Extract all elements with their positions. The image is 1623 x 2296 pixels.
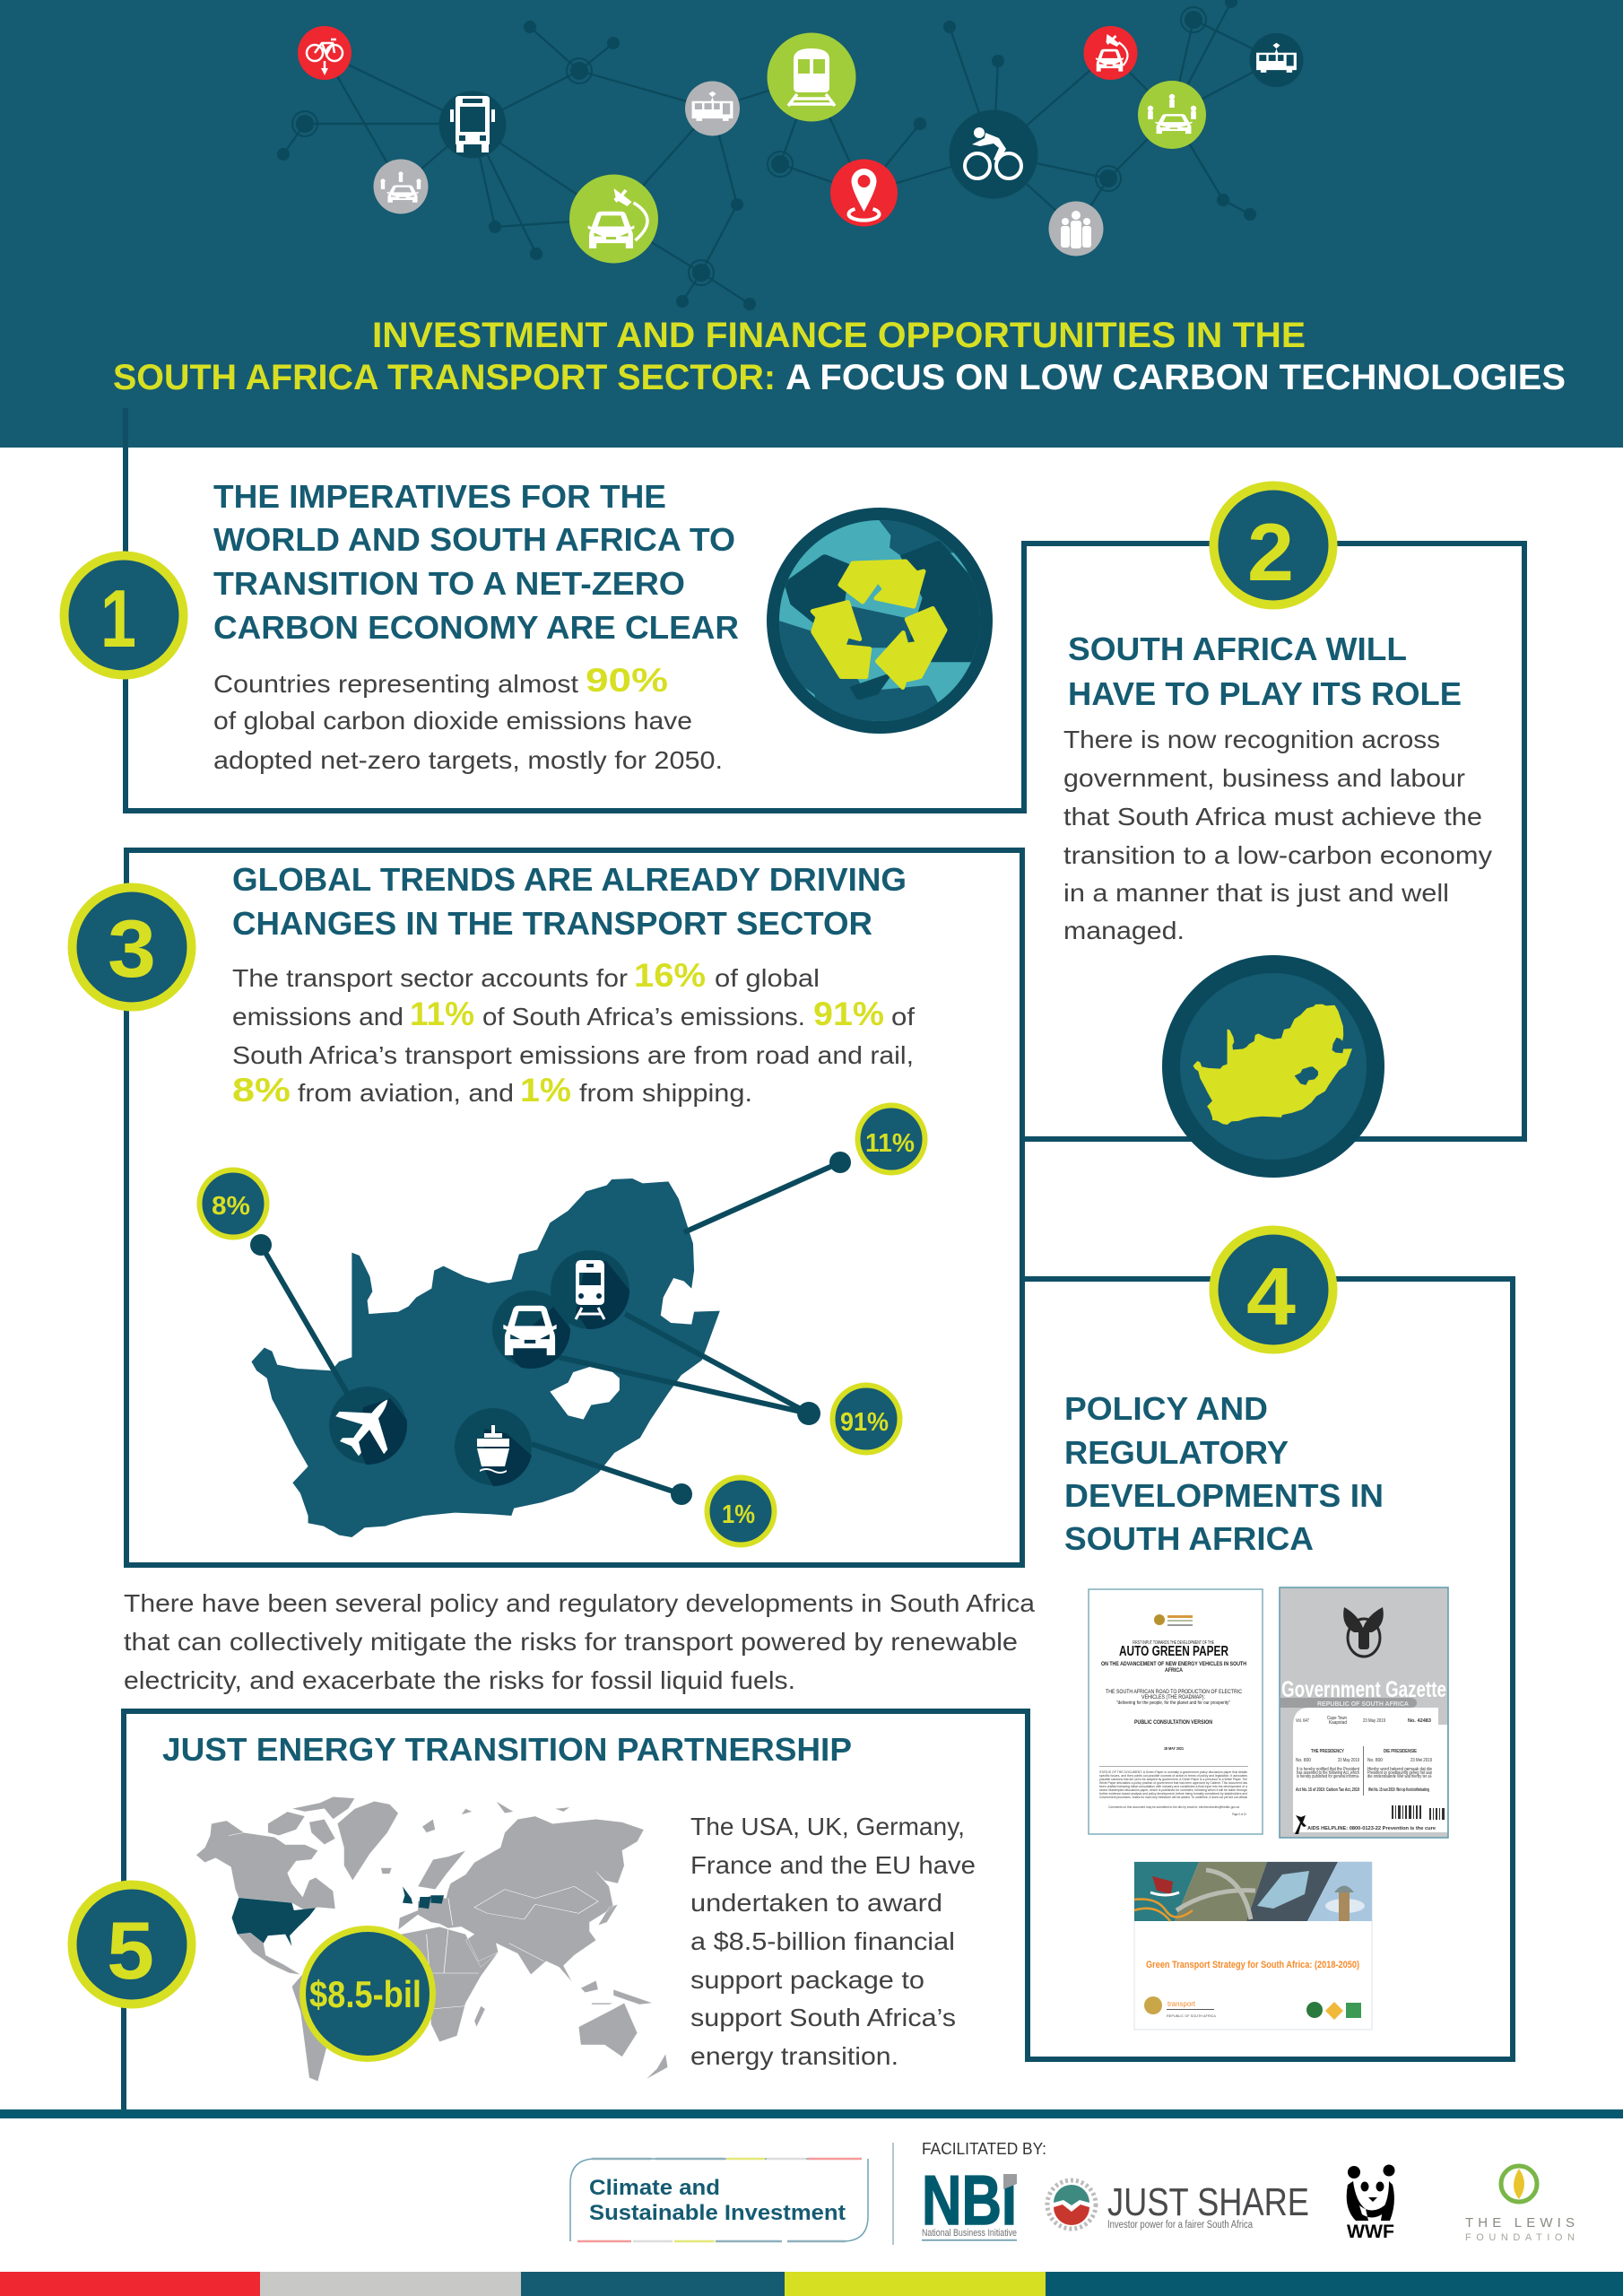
highlighted EU partner [431,1895,444,1904]
document: Green Transport Strategy cover [1134,1862,1372,2030]
heading: section 1: TRANSITION TO A NET-ZERO [213,565,685,602]
icon: cyclist [949,109,1038,199]
document: Auto Green Paper cover: Page 0 of 10 [1232,1813,1246,1816]
text: policy paragraph: There have been several policy and regulatory developments in South Africa [124,1589,1035,1617]
title: INVESTMENT AND FINANCE OPPORTUNITIES IN THE [372,316,1306,355]
document: Auto Green Paper cover: White Paper articulates a policy position of government that has been approved by Cabinet. This document has [1099,1781,1247,1785]
logo: Climate and Sustainable Investment [570,2159,868,2241]
label: facilitated by: FACILITATED BY: [922,2140,1046,2158]
document: Auto Green Paper cover: STATUS OF THE DOCUMENT: A Green Paper is normally a government policy discussion paper that details [1099,1770,1247,1774]
document: Government Gazette cover: AIDS HELPLINE: 0800-0123-22 Prevention is the cure [1307,1826,1436,1831]
document: Auto Green Paper cover: "delivering for the people, for the planet and for our prosperity" [1116,1700,1230,1706]
globe dark landmasses [787,543,982,698]
title: SOUTH AFRICA TRANSPORT SECTOR: [113,358,776,397]
text: section 3 body: emissions and [232,1003,404,1031]
logo: Climate and Sustainable Investment: Sustainable Investment [589,2201,846,2225]
icon: shared car green [1138,81,1206,149]
network links [283,2,1276,304]
heading: section 1: CARBON ECONOMY ARE CLEAR [213,609,739,646]
icon: South Africa map badge [1162,955,1384,1178]
document: Auto Green Paper cover: ON THE ADVANCEMENT OF NEW ENERGY VEHICLES IN SOUTH [1101,1661,1246,1667]
text: section 3 body: of [891,1003,915,1031]
text: section 3 body: from shipping. [579,1079,752,1107]
icon: train [551,1250,629,1329]
document: Government Gazette cover: has assented to the following Act, which [1297,1770,1359,1776]
stat: $8.5-bil [303,1928,432,2059]
chart: South Africa emissions map [199,1105,925,1544]
header band [0,0,1623,448]
document: Auto Green Paper cover: AFRICA [1165,1667,1183,1674]
icon: electric bicycle [298,26,352,80]
heading: section 4 [1064,1390,1384,1557]
panel: section 4 frame [1020,1279,1513,2059]
heading: section 3 [232,861,907,942]
continents [196,1796,668,2082]
number badge 5 [72,1885,192,2004]
text: section 1 body: adopted net-zero targets, mostly for 2050. [213,746,723,774]
number badge 3 [72,888,192,1006]
document: Government Gazette cover: No. 800 [1367,1758,1383,1763]
logo: NBI: NBI [922,2161,1017,2239]
heading: section 4: REGULATORY [1064,1434,1289,1471]
map silhouette [251,1178,720,1537]
icon: recycling globe [767,508,993,734]
logo: Just Share: Investor power for a fairer South Africa [1107,2220,1253,2231]
stat: 91%: 91% [840,1408,889,1437]
heading: section 2 [1068,631,1462,712]
document: Government Gazette cover: REPUBLIC OF SOUTH AFRICA [1317,1701,1409,1708]
text: policy paragraph [124,1589,1035,1694]
document: Auto Green Paper cover: 18 MAY 2021 [1164,1746,1184,1751]
awareness ribbon [1295,1815,1306,1834]
stat: $8.5-bil: $8.5-bil [309,1973,421,2015]
white notice area [1293,1708,1447,1832]
icon: aeroplane [329,1387,407,1465]
document: Auto Green Paper cover: Government processes. Dates for each key milestone will be added. To underline, it does not yet set out official [1099,1796,1247,1799]
number badge 1 [65,556,183,674]
panel: section 3 frame [126,850,1022,1565]
highlighted Germany [419,1897,431,1909]
globe mid-tone landmasses [779,520,954,721]
text: section 2 body: that South Africa must achieve the [1063,803,1482,831]
text: policy paragraph: electricity, and exacerbate the risks for fossil liquid fuels. [124,1666,795,1694]
text: section 2 body: There is now recognition across [1063,726,1440,753]
partner logos [1306,2002,1361,2020]
highlighted UK [403,1886,412,1904]
text: section 3 body: South Africa’s transport emissions are from road and rail, [232,1041,914,1069]
document: Government Gazette cover: President sy goedkeuring geheg het aan [1367,1770,1432,1776]
number badge 4 [1214,1231,1332,1349]
text: section 5 body: a $8.5-billion financial [690,1927,955,1955]
heading: section 4: POLICY AND [1064,1390,1268,1427]
document: Government Gazette cover: Hierby word bekend gemaak dat die [1367,1767,1432,1772]
text: policy paragraph: that can collectively mitigate the risks for transport powered by renewable [124,1628,1018,1656]
heading: section 1: WORLD AND SOUTH AFRICA TO [213,521,735,558]
document: Government Gazette cover: is hereby published for general informa- [1297,1774,1359,1779]
icon: people [1049,201,1103,257]
document: Government Gazette cover: 23 Mei 2019 [1410,1758,1432,1763]
logo: Climate and Sustainable Investment: Climate and [589,2176,720,2200]
text: section 5 body: energy transition. [690,2042,898,2070]
network hubs and dots [277,0,1256,310]
text: section 2 body: transition to a low-carbon economy [1063,841,1492,869]
number badge 2 [1214,486,1332,604]
text: section 5 body: support South Africa’s [690,2004,956,2031]
title: A FOCUS ON LOW CARBON TECHNOLOGIES [785,358,1566,397]
document: Auto Green Paper cover: possible solutions that are yet to be adopted by government. A Green Paper is a precursor to a White Paper. The [1099,1778,1247,1781]
stat: 91% [832,1385,900,1453]
document: Government Gazette cover: It is hereby notified that the President [1297,1767,1360,1772]
heading: section 4: SOUTH AFRICA [1064,1520,1314,1557]
text: section 5 body: support package to [690,1966,924,1994]
text: section 3 body [232,957,915,1109]
department logo: transport [1167,2000,1196,2008]
icon: shared car grey [373,160,429,213]
document: Auto Green Paper cover: Comments on this document may be submitted to the dtic by email to: electricvehicles@thedtic.gov.za [1108,1805,1240,1809]
title [113,316,1566,397]
highlighted USA [232,1898,316,1946]
logo: Just Share [1047,2180,1309,2231]
heading: section 2: HAVE TO PLAY ITS ROLE [1068,675,1462,712]
heading: section 3: CHANGES IN THE TRANSPORT SECTOR [232,905,872,942]
logo divider [893,2143,894,2245]
document: Government Gazette cover: No. 42483 [1408,1718,1431,1724]
document: Auto Green Paper cover: specific issues, and then points out possible courses of action in terms of policy and legislation. It advocates [1099,1774,1247,1778]
document: Government Gazette cover: 23 May 2019 [1363,1718,1385,1724]
panel: section 2 frame [1020,544,1524,1139]
document: Auto Green Paper cover [1089,1589,1263,1834]
icon: ship [455,1408,532,1486]
logo: WWF: WWF [1347,2222,1394,2242]
text: section 2 body [1063,726,1492,944]
text: section 5 body [690,1813,976,2070]
document: Government Gazette cover: die onderstaande Wet wat hierby ter al- [1367,1774,1432,1779]
number badge 4: 4 [1246,1252,1296,1343]
text: section 3 body: of South Africa’s emissions. [482,1003,805,1031]
text: section 2 body: managed. [1063,917,1185,944]
text: section 5 body: The USA, UK, Germany, [690,1813,965,1840]
document: Government Gazette cover: Vol. 647 [1296,1718,1309,1724]
document: Government Gazette cover [1280,1587,1448,1838]
text: section 2 body: government, business and labour [1063,764,1465,792]
document: Government Gazette cover: DIE PRESIDENSIE [1384,1749,1418,1754]
heading: section 1 [213,478,739,646]
text: section 3 body: from aviation, and [298,1079,514,1107]
icon: tram grey [685,81,740,136]
panel: section 1 frame [126,408,1024,811]
document: Auto Green Paper cover: PUBLIC CONSULTATION VERSION [1134,1719,1212,1726]
logo: The Lewis Foundation: THE LEWIS [1465,2215,1575,2231]
stat: 11% [857,1105,925,1173]
department logo: REPUBLIC OF SOUTH AFRICA [1167,2014,1217,2018]
stat: 8% [199,1170,267,1238]
icon: car [492,1291,570,1369]
text: section 1 body: of global carbon dioxide emissions have [213,707,692,735]
text: section 5 body: France and the EU have [690,1851,976,1879]
document: Auto Green Paper cover: THE SOUTH AFRICAN ROAD TO PRODUCTION OF ELECTRIC [1106,1689,1242,1695]
heading: section 2: SOUTH AFRICA WILL [1068,631,1407,667]
document: Auto Green Paper cover: FIRST INPUT TOWARDS THE DEVELOPMENT OF THE [1133,1640,1214,1646]
number badge 3: 3 [108,904,156,995]
icon: dark tram [1250,33,1304,87]
document: Government Gazette cover: Kaapstad [1329,1720,1347,1726]
document: Government Gazette cover: Wet No. 15 van 2019: Wet op Koolstofbelasting [1368,1787,1429,1793]
logo: The Lewis Foundation: FOUNDATION [1465,2232,1575,2243]
icon: electric car [569,174,658,264]
document: Auto Green Paper cover: AUTO GREEN PAPER [1119,1644,1228,1659]
document: Auto Green Paper cover: been drafted following initial consultation with industry and constitutes a final input into the development of a [1099,1785,1247,1788]
text: section 1 body [213,662,723,774]
logo: NBI: National Business Initiative [922,2228,1017,2239]
text: section 3 body: of global [715,964,820,992]
recycling arrows [804,561,953,692]
document: Government Gazette cover: No. 800 [1296,1758,1311,1763]
number badge 5: 5 [107,1906,154,1996]
heading: section 3: GLOBAL TRENDS ARE ALREADY DRIVING [232,861,907,898]
coat of arms [1343,1607,1384,1657]
icon: location pin [830,160,898,226]
heading: section 5: JUST ENERGY TRANSITION PARTNERSHIP [162,1731,852,1768]
photo band [1134,1862,1372,1921]
number badge 1: 1 [100,574,136,665]
document: Government Gazette cover: Act No. 15 of 2019: Carbon Tax Act, 2019 [1296,1787,1359,1793]
text: section 3 body: 16% [634,957,706,994]
stat: 8%: 8% [212,1192,250,1221]
transport network illustration [277,0,1304,310]
text: section 3 body: The transport sector accounts for [232,964,628,992]
document: Government Gazette cover: Cape Town [1327,1716,1347,1721]
number badge 2: 2 [1247,508,1294,598]
heading: section 4: DEVELOPMENTS IN [1064,1477,1384,1514]
leader dots [250,1152,851,1505]
document: Auto Green Paper cover: VEHICLES (THE ROADMAP): [1141,1694,1205,1700]
coat of arms logo [1154,1614,1193,1626]
logo: The Lewis Foundation [1465,2166,1575,2243]
gazette masthead bar [1280,1698,1417,1708]
leader lines [261,1162,840,1494]
department logo [1144,1996,1217,2018]
document: Government Gazette cover: Government Gazette [1281,1677,1446,1702]
document: Government Gazette cover: THE PRESIDENCY [1311,1749,1345,1754]
text: section 5 body: undertaken to award [690,1889,942,1917]
text: section 2 body: in a manner that is just and well [1063,879,1449,907]
stat: 1% [707,1478,775,1544]
stat: 1%: 1% [722,1500,755,1529]
text: section 1 body: 90% [586,662,668,699]
text: section 3 body: 91% [813,996,884,1032]
barcode [1392,1805,1445,1820]
document: Green Transport Strategy cover: Green Transport Strategy for South Africa: (2018-2050) [1146,1960,1359,1970]
panel: section 5 frame [124,1711,1030,2109]
document: Government Gazette cover: 23 May 2019 [1338,1758,1359,1763]
text: section 1 body: Countries representing almost [213,670,578,698]
footer colour strip [0,2272,1623,2296]
text: section 3 body: 8% [232,1072,291,1109]
text: section 3 body: 1% [520,1072,571,1109]
national borders [229,1832,598,2009]
text: section 3 body: 11% [410,996,474,1032]
logo: WWF [1347,2165,1395,2242]
footer divider bar [0,2109,1623,2118]
heading: section 1: THE IMPERATIVES FOR THE [213,478,666,515]
chart: world map [196,1796,668,2082]
icon: bus [439,91,506,158]
icon: train [768,32,855,122]
logo: Just Share: JUST SHARE [1107,2180,1309,2224]
document: Auto Green Paper cover: further evidence-based analysis and policy development, before being formally considered by stakeholders and [1099,1792,1247,1796]
stat: 11%: 11% [865,1129,915,1158]
document: Auto Green Paper cover: sector Masterplan discussion paper, which is published for comment, following which it will be taken through [1099,1788,1247,1792]
icon: red electric car [1083,26,1137,80]
